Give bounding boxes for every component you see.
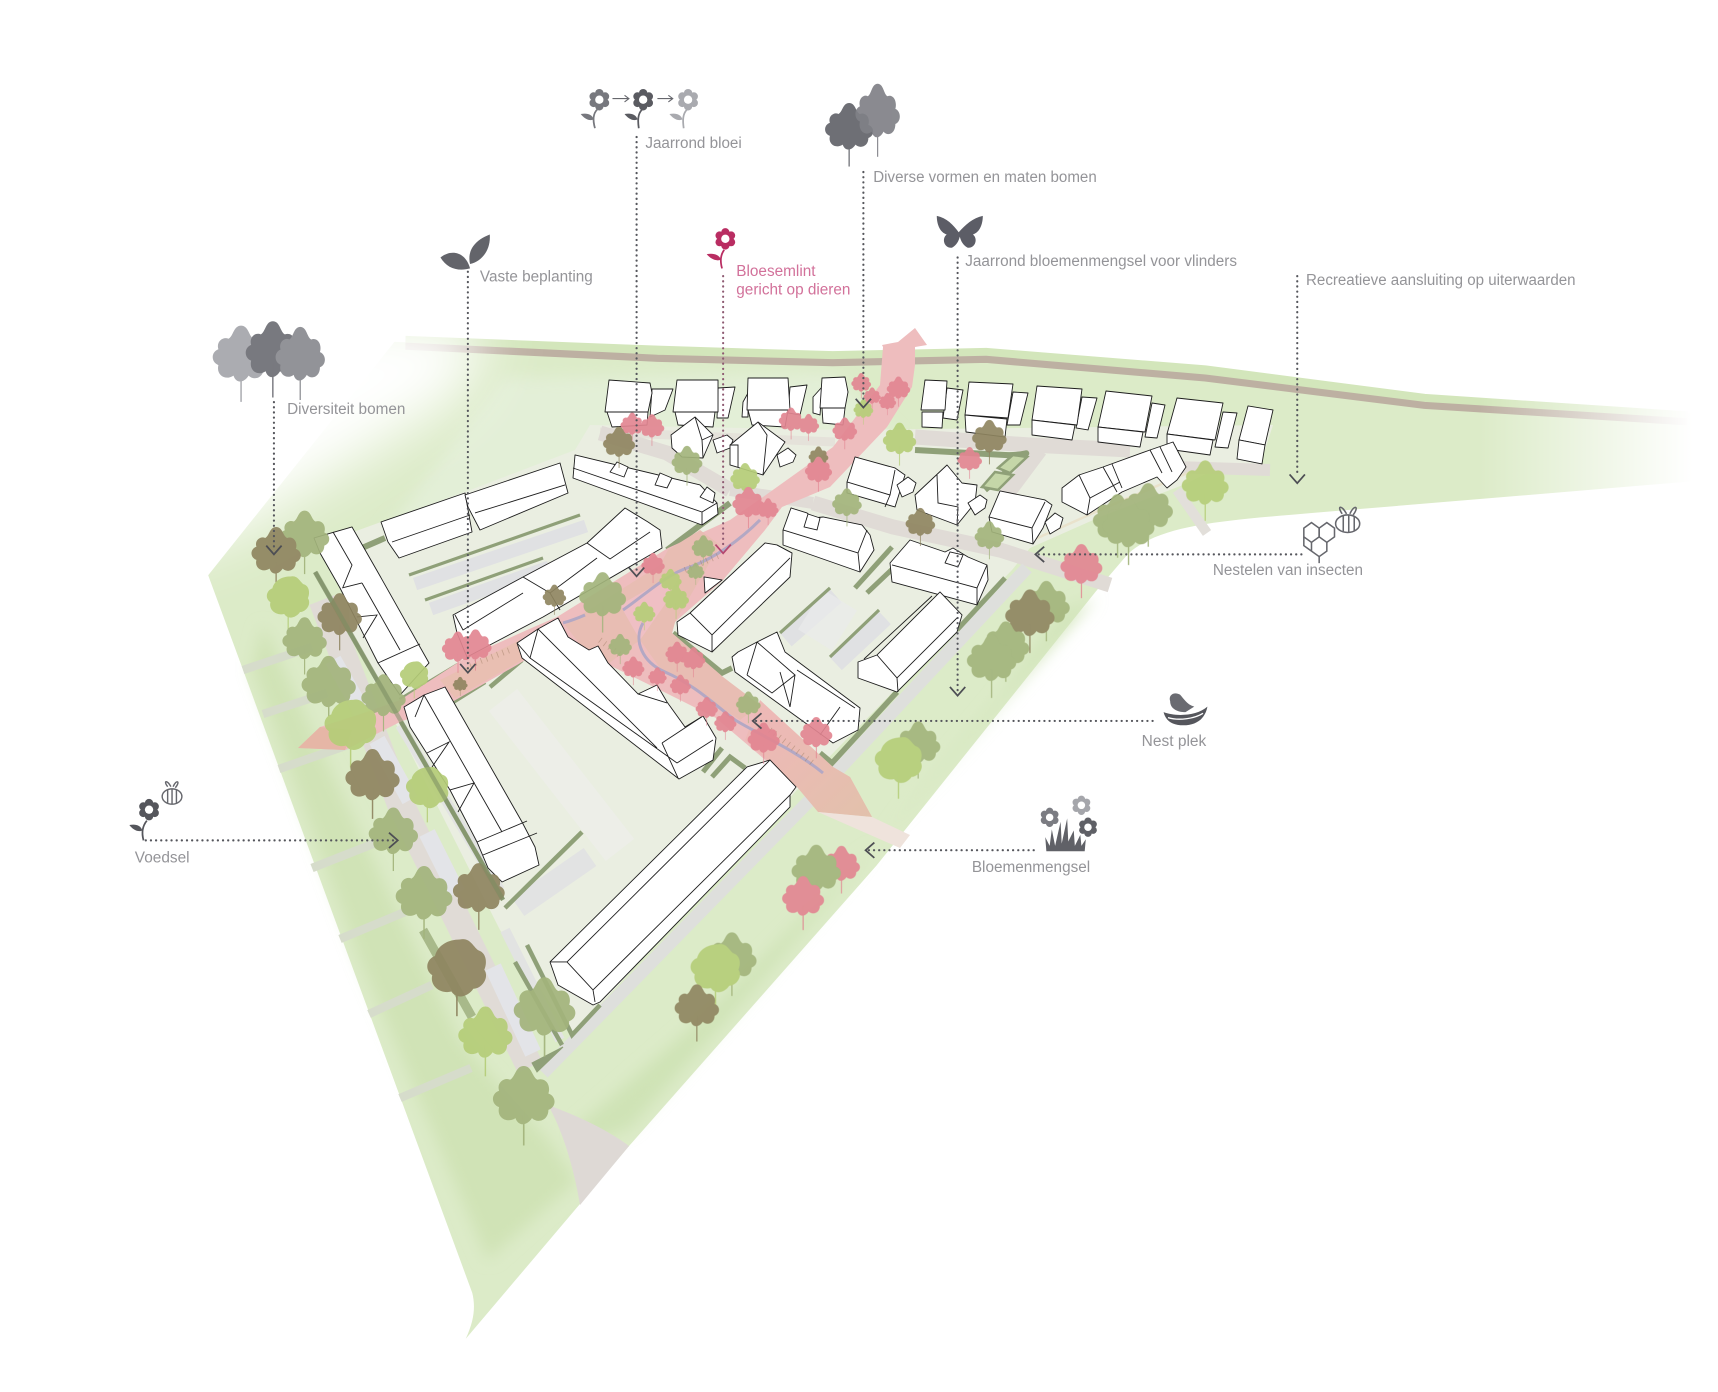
trees: west avenue xyxy=(251,511,575,1145)
icon: flower mix with grass xyxy=(1041,796,1097,851)
soft white fade in the north-west xyxy=(121,296,493,564)
trees: along the blossom ribbon xyxy=(442,373,1007,764)
label: Bloemenmengsel: Bloemenmengsel xyxy=(972,859,1090,876)
label: Recreatieve aansluiting op uiterwaarden: Recreatieve aansluiting op uiterwaarden xyxy=(1306,272,1576,289)
icon: bird on nest xyxy=(1164,693,1207,725)
label: Diverse vormen en maten bomen: Diverse vormen en maten bomen xyxy=(873,169,1097,186)
icon: year-round flowers xyxy=(581,89,698,128)
hedges xyxy=(315,450,1027,1072)
label: Vaste beplanting: Vaste beplanting xyxy=(480,269,593,286)
buildings: west and south blocks xyxy=(314,527,796,1005)
fade to the right xyxy=(1468,383,1718,504)
icon: honeycomb and bee xyxy=(1304,507,1360,563)
road along the dike xyxy=(405,341,1687,422)
label: Jaarrond bloemenmengsel voor vlinders: Jaarrond bloemenmengsel voor vlinders xyxy=(965,253,1237,270)
callout lines and arrows xyxy=(146,137,1306,858)
label: Jaarrond bloei: Jaarrond bloei xyxy=(645,135,742,152)
icon: leaves xyxy=(440,234,490,270)
neighbourhood floor xyxy=(345,425,1273,1035)
icon: two trees of different size xyxy=(825,84,900,167)
buildings: second row gabled houses xyxy=(381,417,796,558)
hedge showing through the avenue trees xyxy=(316,572,503,900)
buildings: central long blocks xyxy=(453,508,962,779)
label: Bloesemlint gericht op dieren: gericht op dieren xyxy=(736,282,850,299)
icon: butterfly xyxy=(937,216,983,248)
icon: three trees xyxy=(213,321,325,402)
buildings: centre and east houses xyxy=(783,442,1186,605)
buildings: north row xyxy=(605,377,1273,464)
label: Diversiteit bomen: Diversiteit bomen xyxy=(287,401,405,418)
label: Bloesemlint gericht op dieren: Bloesemlint xyxy=(736,263,816,280)
trees: south-east strip xyxy=(675,460,1229,1042)
label: Voedsel: Voedsel xyxy=(135,849,190,866)
label: Nest plek: Nest plek xyxy=(1142,733,1207,750)
roads and paths xyxy=(243,432,1270,1205)
ground: green site plane xyxy=(208,342,1709,1339)
icon: pink flower xyxy=(707,228,735,268)
icon: flower and bee for food xyxy=(129,782,182,840)
label: Nestelen van insecten: Nestelen van insecten xyxy=(1213,562,1363,579)
bloesemlint: pink ribbon with arrows xyxy=(298,328,927,848)
